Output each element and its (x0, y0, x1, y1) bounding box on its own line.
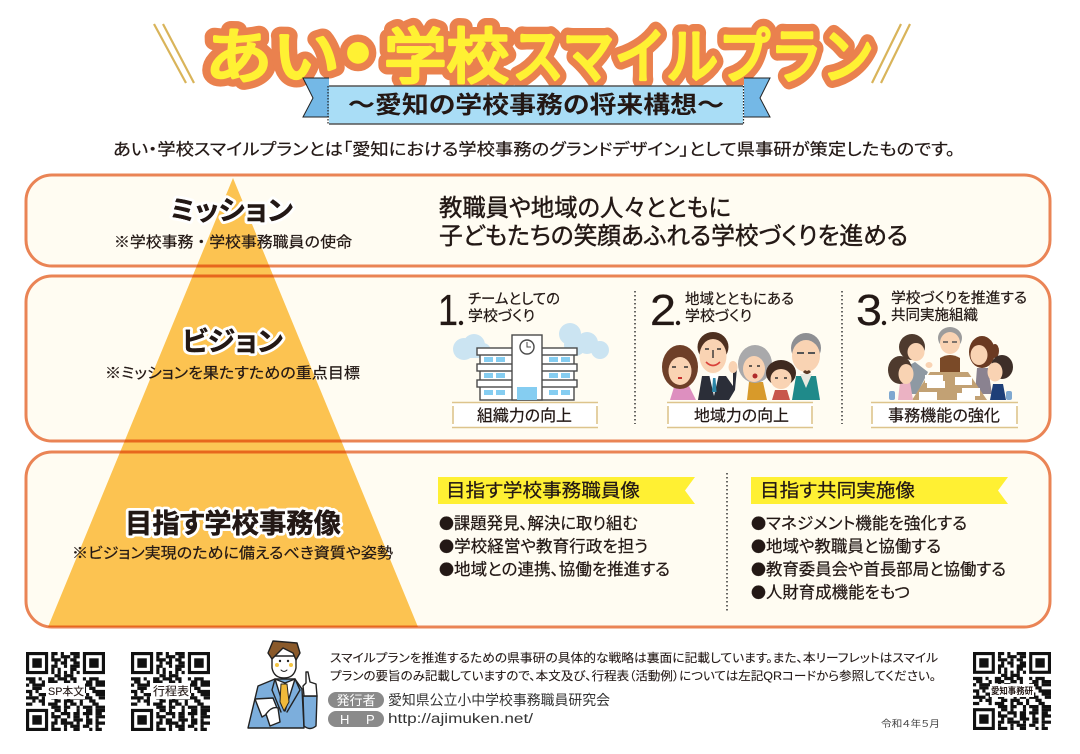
mission statement (439, 195, 908, 250)
panel: vision background (26, 276, 1050, 441)
vision item 3: 学校づくりを推進する (891, 290, 1027, 307)
list: ideal staff: ●地域との連携、協働を推進する (439, 559, 670, 580)
title decoration: right double lines (872, 24, 910, 83)
tag: ideal joint implementation: 目指す共同実施像 (760, 480, 915, 501)
title: ・ (328, 22, 388, 89)
QR code: association (973, 654, 1051, 728)
mission heading: ミッション (170, 196, 293, 226)
intro text: あい・学校スマイルプランとは「愛知における学校事務のグランドデザイン」として県事研が策定したものです。 (113, 139, 955, 159)
QR code: SP text: SP本文 (48, 684, 84, 698)
vision item 3 (856, 286, 1027, 428)
title decoration: left double lines (154, 24, 194, 83)
list: ideal staff: ●学校経営や教育行政を担う (439, 536, 648, 557)
vision item 3: 共同実施組織 (891, 307, 978, 324)
mission heading: ミッション (170, 196, 293, 226)
tag: ideal staff: 目指す学校事務職員像 (446, 480, 640, 501)
title: 学校 (384, 24, 509, 91)
subtitle ribbon (303, 78, 770, 124)
title: あい (205, 24, 340, 91)
label: community: 地域力の向上 (694, 407, 789, 425)
list: ideal staff: ●課題発見、解決に取り組む (439, 513, 638, 534)
vision item 2: 地域とともにある (685, 291, 794, 308)
vision heading: ビジョン (182, 327, 283, 357)
ideal staff column (438, 477, 695, 580)
publisher row: 愛知県公立小中学校事務職員研究会 (388, 692, 610, 708)
ideal heading (72, 509, 393, 562)
list: ideal joint implementation: ●教育委員会や首長部局と協働する (751, 559, 1006, 580)
footer note: スマイルプランを推進するための県事研の具体的な戦略は裏面に記載しています。また、本リーフレットはスマイル (330, 650, 938, 665)
website row: H (340, 712, 349, 727)
tag: ideal staff (438, 477, 695, 504)
mission heading: ※学校事務・学校事務職員の使命 (114, 234, 352, 251)
vision item 1: チームとしての (468, 292, 560, 308)
mission statement: 教職員や地域の人々とともに (439, 195, 731, 222)
icon: meeting around table (888, 327, 1013, 400)
footer note: プランの要旨のみ記載していますので、本文及び、行程表（活動例）については左記QRコードから参照してください。 (330, 668, 936, 683)
label: office function (871, 402, 1018, 428)
label: community (667, 402, 813, 428)
mission statement: 子どもたちの笑顔あふれる学校づくりを進める (439, 223, 908, 250)
list: ideal joint implementation: ●人財育成機能をもつ (751, 582, 910, 603)
mission heading (114, 196, 352, 251)
website row: P (366, 712, 375, 727)
website row: http://ajimuken.net/ (388, 711, 533, 726)
title: 学校 (384, 24, 509, 91)
ideal joint column (751, 477, 1008, 603)
column divider (726, 473, 728, 612)
ideal heading: 目指す学校事務像 (125, 509, 341, 539)
panel: ideal background (26, 452, 1050, 627)
publisher row: 発行者 (336, 693, 376, 708)
title (205, 22, 874, 91)
title: あい (205, 24, 340, 91)
QR code: schedule: 行程表 (153, 685, 190, 698)
vision item 2 (650, 286, 821, 428)
icon: man in suit pointing (248, 641, 317, 728)
list: ideal staff (439, 513, 670, 580)
title: ・ (328, 22, 388, 89)
footer note (330, 650, 938, 683)
title: スマイルプラン (512, 24, 874, 91)
vision heading: ※ミッションを果たすための重点目標 (105, 365, 360, 382)
date: 令和４年５月 (881, 718, 940, 730)
vision item 2: 学校づくり (685, 308, 752, 325)
tag: ideal joint implementation (751, 477, 1008, 504)
ideal heading: ※ビジョン実現のために備えるべき資質や姿勢 (72, 544, 393, 562)
label: organization: 組織力の向上 (477, 407, 572, 425)
vision item 3: 3 (856, 286, 882, 335)
vision divider 1 (634, 291, 636, 424)
icon: family and community people (662, 332, 821, 400)
label: office function: 事務機能の強化 (888, 407, 1000, 425)
vision divider 2 (841, 291, 843, 424)
subtitle ribbon: ～愛知の学校事務の将来構想～ (348, 92, 724, 119)
QR code: SP text (26, 654, 105, 729)
vision item 1: 学校づくり (468, 308, 535, 325)
ideal heading: 目指す学校事務像 (125, 509, 341, 539)
vision item 2: 2 (650, 286, 676, 335)
vision item 1: 1 (438, 286, 458, 335)
label: organization (452, 402, 598, 428)
QR code: schedule (131, 654, 210, 729)
title: スマイルプラン (512, 24, 874, 91)
panel: mission background (26, 175, 1050, 266)
list: ideal joint implementation: ●地域や教職員と協働する (751, 536, 941, 557)
website row (328, 711, 533, 727)
list: ideal joint implementation (751, 513, 1006, 603)
QR code: association: 愛知事務研 (991, 685, 1033, 696)
list: ideal joint implementation: ●マネジメント機能を強化する (751, 513, 967, 534)
vision heading (105, 327, 360, 382)
pyramid (48, 178, 418, 627)
vision item 1 (438, 286, 609, 428)
icon: school building (453, 323, 609, 400)
vision heading: ビジョン (182, 327, 283, 357)
